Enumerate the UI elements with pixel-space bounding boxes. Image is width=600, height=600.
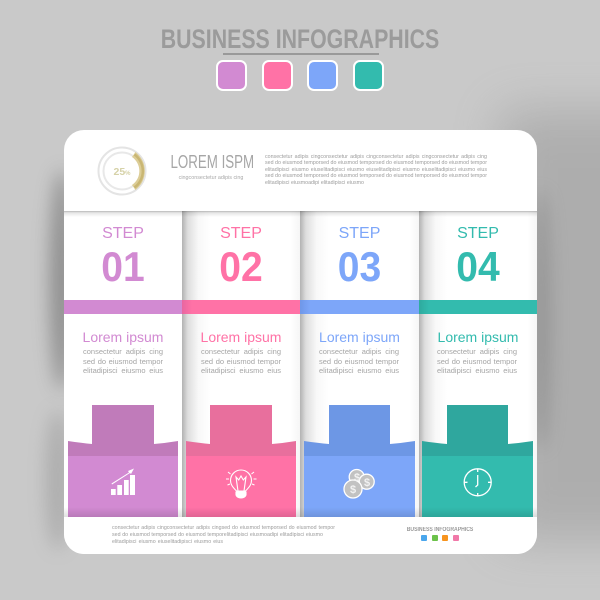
footer paragraph: sed do eiusmod temporsed do eiusmod temporelitadipisci eiusmoadipi elitadipisci eiusmo bbox=[112, 532, 323, 538]
footer panel bbox=[64, 517, 537, 554]
header paragraph: elitadipisci eiusmoadipi elitadipisci eiusmo bbox=[265, 180, 364, 186]
icon: clock bbox=[464, 469, 491, 496]
icon: coins: $ bbox=[350, 484, 356, 496]
icon: growth chart bbox=[111, 468, 135, 495]
header paragraph: elitadipisci eiusmo eiuselitadipisci eiusmo eiuselitadipisci eiusmo eiuselitadipisci eiusmo eius bbox=[265, 167, 487, 173]
step 02 column bbox=[201, 224, 281, 375]
block 02 bbox=[186, 405, 296, 517]
title underline bbox=[222, 53, 378, 54]
description 01: consectetur adipis cing bbox=[83, 347, 163, 356]
description 01: sed do eiusmod tempor bbox=[83, 357, 163, 366]
block 04 bbox=[422, 405, 533, 517]
card bbox=[64, 130, 537, 554]
icon: coins: $ bbox=[364, 477, 370, 489]
description 03 bbox=[319, 347, 399, 375]
description 04 bbox=[437, 347, 517, 375]
description 02: consectetur adipis cing bbox=[201, 347, 281, 356]
footer mini swatches bbox=[421, 535, 459, 541]
lorem heading 04: Lorem ipsum bbox=[438, 329, 518, 345]
header heading: LOREM ISPM bbox=[170, 152, 254, 172]
step number 03: 03 bbox=[338, 243, 381, 290]
block 01 bbox=[68, 405, 178, 517]
step label 02: STEP bbox=[220, 224, 262, 242]
description 02 bbox=[201, 347, 281, 375]
donut chart 25%: 25% bbox=[113, 166, 131, 178]
description 01: elitadipisci eiusmo eius bbox=[83, 366, 163, 375]
icon: light bulb bbox=[226, 470, 256, 498]
icon: coins bbox=[344, 470, 374, 498]
description 04: elitadipisci eiusmo eius bbox=[437, 366, 517, 375]
lorem heading 01: Lorem ipsum bbox=[83, 329, 163, 345]
header paragraph bbox=[265, 154, 487, 186]
colour band bbox=[64, 300, 537, 314]
footer mini title: BUSINESS INFOGRAPHICS bbox=[407, 526, 473, 532]
header subtext: cingconsectetur adipis cing bbox=[179, 175, 243, 181]
description 02: sed do eiusmod tempor bbox=[201, 357, 281, 366]
step 03 column bbox=[319, 224, 400, 375]
description 04: sed do eiusmod tempor bbox=[437, 357, 517, 366]
header paragraph: consectetur adipis cingconsectetur adipis cingconsectetur adipis cingconsectetur adipis cing bbox=[265, 154, 487, 160]
footer paragraph bbox=[112, 525, 335, 545]
header paragraph: sed do eiusmod temporsed do eiusmod temporsed do eiusmod temporsed do eiusmod tempor bbox=[265, 173, 487, 179]
description 04: consectetur adipis cing bbox=[437, 347, 517, 356]
step label 03: STEP bbox=[339, 224, 380, 242]
block 03 bbox=[304, 405, 415, 517]
description 03: consectetur adipis cing bbox=[319, 347, 399, 356]
donut chart 25% bbox=[98, 146, 146, 196]
description 03: elitadipisci eiusmo eius bbox=[319, 366, 399, 375]
description 01 bbox=[83, 347, 163, 375]
footer paragraph: consectetur adipis cingconsectetur adipis cingsed do eiusmod temporsed do eiusmod tempor bbox=[112, 525, 335, 531]
header paragraph: sed do eiusmod temporsed do eiusmod temporsed do eiusmod temporsed do eiusmod tempor bbox=[265, 160, 487, 166]
footer paragraph: elitadipisci eiusmo eiuselitadipisci eiusmo eius bbox=[112, 539, 223, 545]
lorem heading 03: Lorem ipsum bbox=[319, 329, 400, 345]
step number 01: 01 bbox=[101, 243, 145, 290]
lorem heading 02: Lorem ipsum bbox=[201, 329, 281, 345]
colour swatches bbox=[216, 60, 384, 91]
step label 04: STEP bbox=[457, 224, 499, 242]
step 01 column bbox=[83, 224, 163, 375]
title: BUSINESS INFOGRAPHICS bbox=[161, 24, 439, 54]
description 03: sed do eiusmod tempor bbox=[319, 357, 399, 366]
step 04 column bbox=[437, 224, 518, 375]
step number 04: 04 bbox=[456, 243, 500, 290]
description 02: elitadipisci eiusmo eius bbox=[201, 366, 281, 375]
icon: coins: $ bbox=[354, 472, 360, 484]
step number 02: 02 bbox=[219, 243, 263, 290]
step label 01: STEP bbox=[102, 224, 144, 242]
